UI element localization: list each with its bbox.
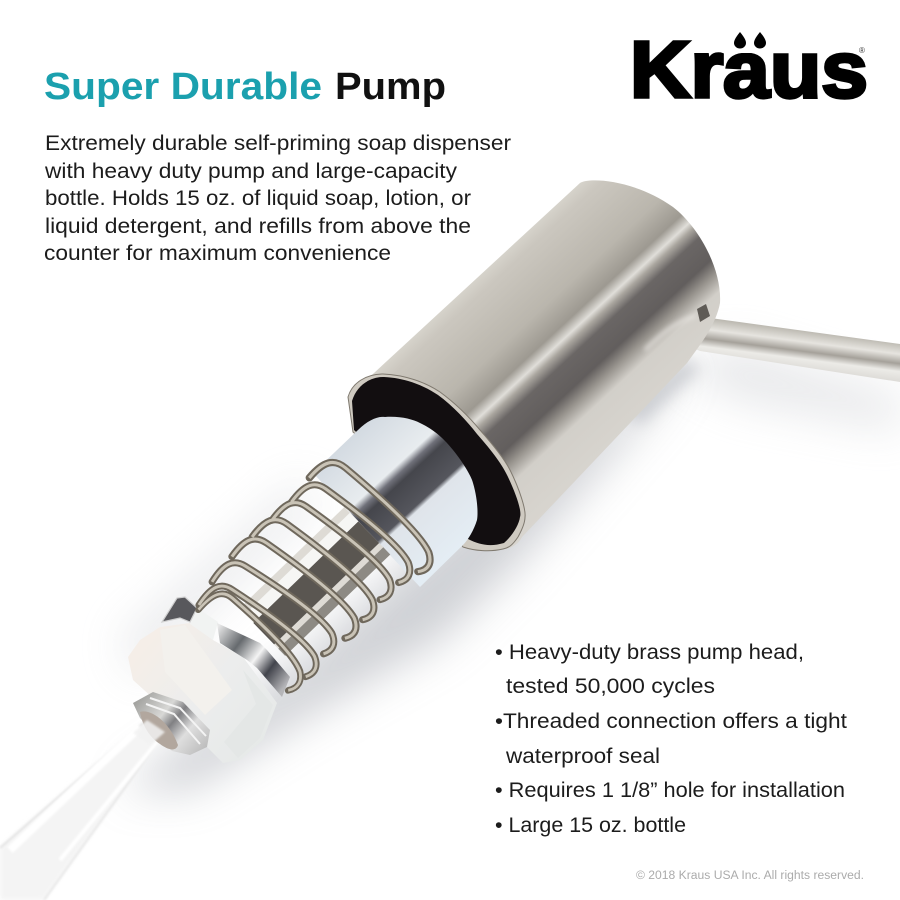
threaded fitting xyxy=(133,692,210,755)
title: Pump xyxy=(335,66,446,108)
logo wordmark: Kräus xyxy=(630,25,868,114)
spring highlights xyxy=(197,454,442,693)
logo umlaut mask xyxy=(728,28,772,53)
coil spring xyxy=(197,454,442,693)
cylinder opening xyxy=(352,377,520,545)
soft shadows xyxy=(120,345,900,790)
metal collar xyxy=(217,623,290,697)
feature list: • Large 15 oz. bottle xyxy=(495,814,686,837)
spring front arcs xyxy=(197,454,442,693)
metal tab xyxy=(162,597,197,622)
feature list: waterproof seal xyxy=(505,745,660,768)
description paragraph: with heavy duty pump and large-capacity xyxy=(44,160,458,183)
cylinder rim xyxy=(348,374,525,551)
clear suction tube xyxy=(0,720,165,900)
connecting rod xyxy=(687,317,900,382)
cylinder rod socket xyxy=(697,304,710,322)
feature list: • Heavy-duty brass pump head, xyxy=(495,641,804,664)
description paragraph: liquid detergent, and refills from above the xyxy=(45,215,471,238)
feature list: •Threaded connection offers a tight xyxy=(495,710,847,733)
white plastic nut xyxy=(128,608,277,763)
feature list xyxy=(495,641,847,837)
title: Super Durable xyxy=(44,66,322,108)
inner metal tube xyxy=(313,417,478,587)
description paragraph: counter for maximum convenience xyxy=(44,242,391,265)
description paragraph xyxy=(44,132,511,265)
feature list: tested 50,000 cycles xyxy=(506,675,715,698)
description paragraph: Extremely durable self-priming soap dispenser xyxy=(45,132,511,155)
description paragraph: bottle. Holds 15 oz. of liquid soap, lotion, or xyxy=(45,187,471,210)
inner stem visible through spring xyxy=(239,507,390,656)
brushed metal cylinder xyxy=(348,180,720,551)
registered mark: ® xyxy=(859,46,865,55)
product photo: soap dispenser pump xyxy=(0,180,900,900)
feature list: • Requires 1 1/8” hole for installation xyxy=(495,779,845,802)
logo: Kraus xyxy=(630,25,868,114)
copyright footer: © 2018 Kraus USA Inc. All rights reserved. xyxy=(636,870,864,882)
icon: water drops xyxy=(734,32,766,48)
cylinder reflection xyxy=(645,316,695,350)
